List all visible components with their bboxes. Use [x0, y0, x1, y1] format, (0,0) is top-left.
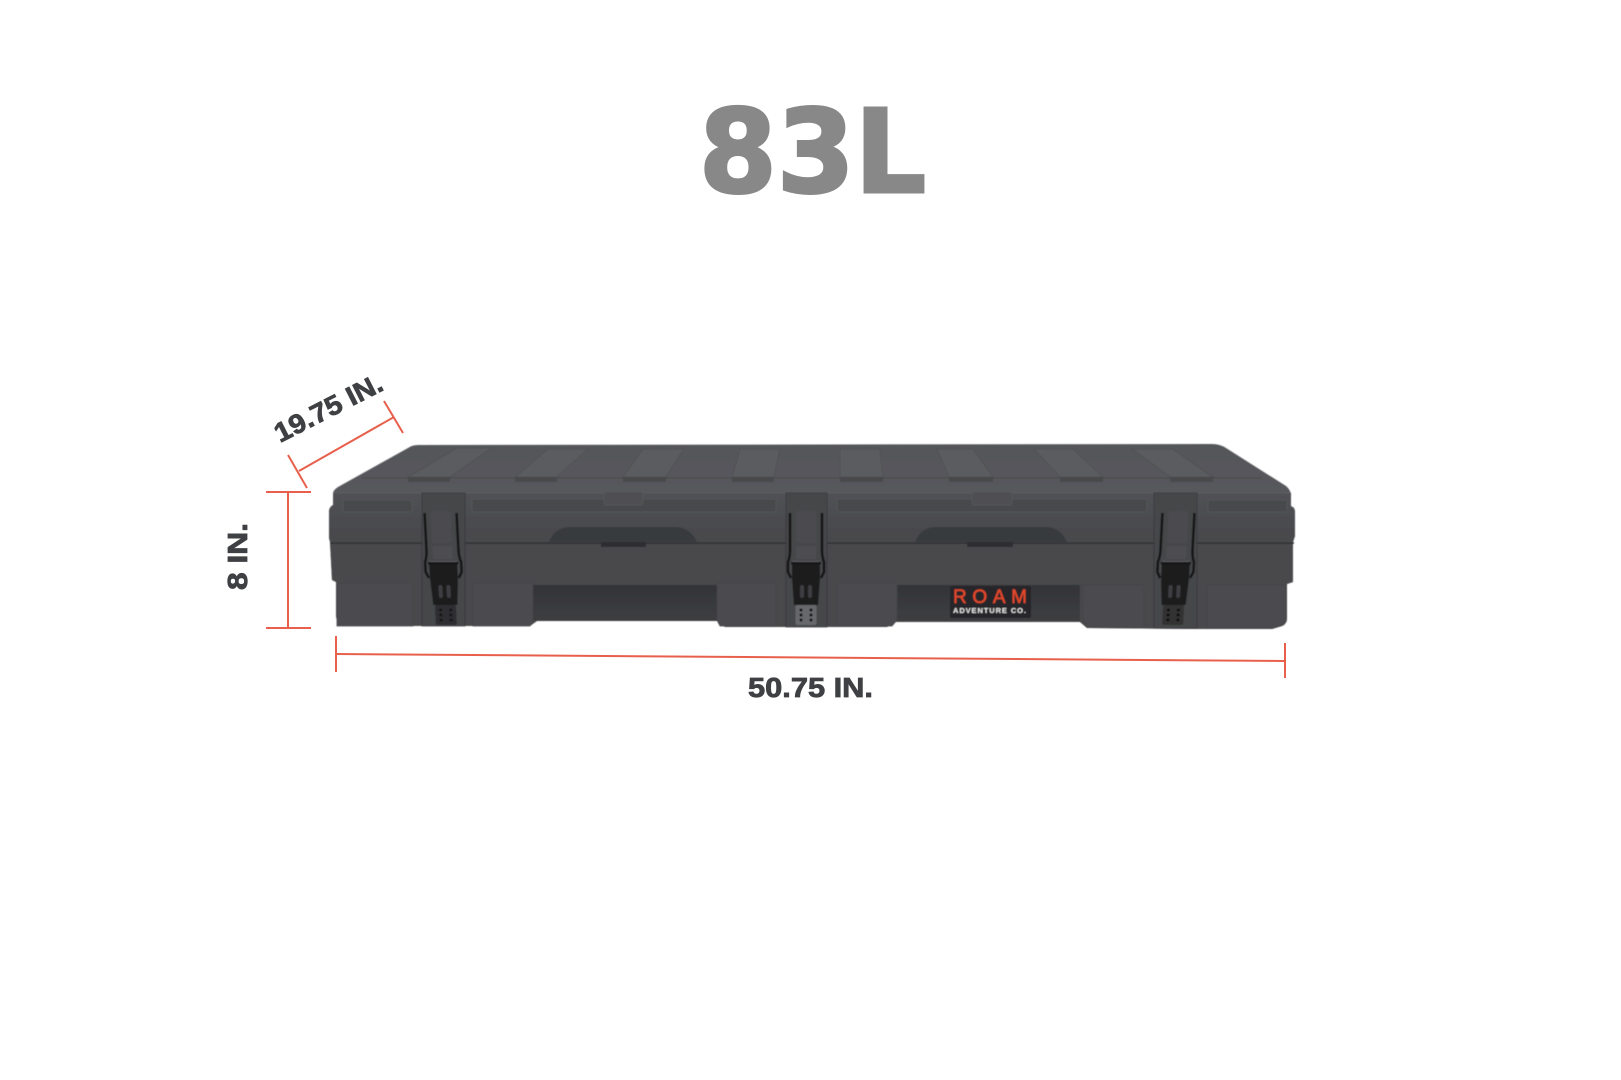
- logo: ROAM Adventure Co.: ROAM: [953, 587, 1027, 608]
- logo: ROAM Adventure Co.: [950, 586, 1031, 618]
- logo: ROAM Adventure Co.: ADVENTURE CO.: [953, 606, 1026, 615]
- depth label: 19.75 IN.: [269, 368, 388, 448]
- latch channels: [422, 493, 1197, 628]
- latch: middle: [788, 511, 824, 625]
- latch: left: [422, 511, 464, 625]
- latch: right: [1155, 511, 1197, 625]
- handle cutouts: [549, 527, 1067, 547]
- width dimension line: [336, 636, 1285, 678]
- base notches: [533, 585, 1080, 621]
- lid front: [329, 493, 1295, 542]
- depth dimension line: [288, 401, 403, 488]
- storage case product illustration: [329, 444, 1295, 629]
- lid edge lines: [330, 478, 1294, 543]
- foot panels: [337, 583, 1286, 628]
- width label: 50.75 IN.: [748, 672, 873, 703]
- strap front lips: [408, 477, 1213, 482]
- lid recessed strips and tabs: [343, 492, 1287, 512]
- height dimension line: [266, 492, 311, 628]
- case silhouette and top surface: [329, 444, 1295, 629]
- title: 83L: 83L: [699, 86, 926, 220]
- lower body: [330, 543, 1293, 629]
- height label: 8 IN.: [222, 523, 253, 590]
- lid straps: [408, 448, 1213, 477]
